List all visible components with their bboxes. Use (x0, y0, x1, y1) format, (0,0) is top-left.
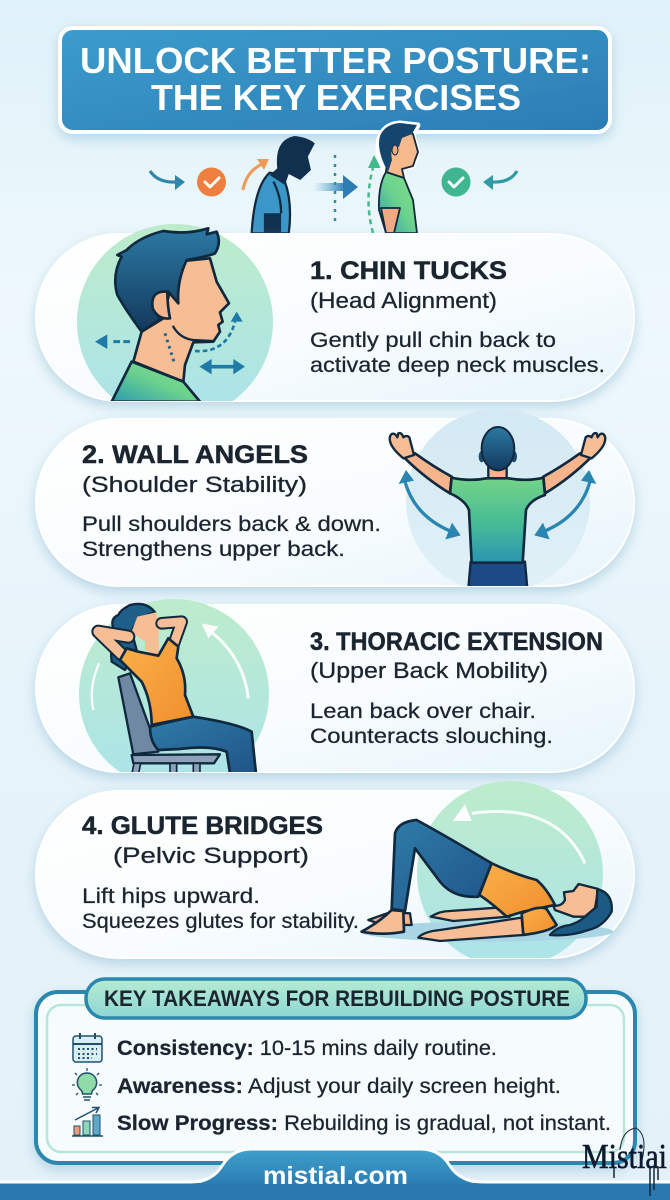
icon: orange check (197, 168, 226, 196)
icon: growth chart (72, 1108, 103, 1136)
outer frame (36, 992, 635, 1163)
subheading: (Head Alignment) (310, 288, 497, 313)
header text: KEY TAKEAWAYS FOR REBUILDING POSTURE (104, 986, 570, 1011)
website: mistial.com (263, 1162, 408, 1190)
subheading: (Pelvic Support) (113, 843, 309, 868)
card (36, 605, 634, 772)
watermark (582, 1128, 667, 1196)
title line 2: THE KEY EXERCISES (151, 77, 521, 118)
subheading: (Shoulder Stability) (82, 472, 307, 497)
panel: chin tucks (36, 224, 634, 420)
illustration: wall angels (390, 409, 605, 593)
text: slow progress: Slow Progress: Rebuilding is gradual, not instant. (117, 1112, 611, 1135)
description line 2: activate deep neck muscles. (310, 354, 605, 377)
icon: green check (442, 168, 470, 196)
title banner (60, 28, 610, 132)
figure: slumped man (252, 136, 315, 233)
figure: upright man (378, 123, 418, 233)
card (36, 791, 634, 958)
text: awareness: Awareness: Adjust your daily screen height. (117, 1075, 561, 1098)
illustration: chin tuck (77, 224, 273, 420)
description line 2: Strengthens upper back. (82, 538, 345, 561)
card (36, 419, 634, 586)
icon: light bulb (72, 1068, 102, 1100)
panel: wall angels (36, 409, 634, 593)
figure: posture transition (150, 123, 517, 233)
panel: thoracic extension (36, 599, 634, 789)
footer outline (0, 1149, 670, 1182)
panel: glute bridges (36, 781, 634, 967)
arrow: left blue (150, 171, 185, 190)
illustration: thoracic extension (79, 599, 269, 789)
description line 2: Squeezes glutes for stability. (82, 910, 359, 933)
description line 1: Pull shoulders back & down. (82, 513, 381, 536)
footer tab (190, 1150, 484, 1184)
heading: 3. THORACIC EXTENSION (310, 628, 603, 656)
header pill (86, 979, 586, 1018)
description line 1: Gently pull chin back to (310, 329, 556, 352)
dotted centre line (334, 155, 336, 225)
title line 1: UNLOCK BETTER POSTURE: (80, 40, 591, 81)
description line 2: Counteracts slouching. (310, 725, 553, 748)
heading: 1. CHIN TUCKS (310, 257, 507, 285)
card (36, 234, 634, 401)
arrow: transition (314, 175, 358, 199)
text: consistency: Consistency: 10-15 mins daily routine. (117, 1037, 497, 1060)
description line 1: Lean back over chair. (310, 700, 536, 723)
panel: key takeaways (36, 979, 635, 1163)
subheading: (Upper Back Mobility) (310, 658, 548, 683)
footer bar (0, 1183, 670, 1200)
arrow: orange up (243, 159, 269, 190)
heading: 2. WALL ANGELS (82, 441, 308, 469)
footer (0, 1149, 670, 1200)
arrow: green dashed (368, 155, 381, 233)
heading: 4. GLUTE BRIDGES (82, 812, 323, 840)
illustration: glute bridge (360, 781, 613, 967)
inner frame (47, 1005, 624, 1152)
description line 1: Lift hips upward. (82, 885, 260, 908)
arrow: right teal (483, 171, 517, 190)
icon: calendar (73, 1033, 102, 1062)
